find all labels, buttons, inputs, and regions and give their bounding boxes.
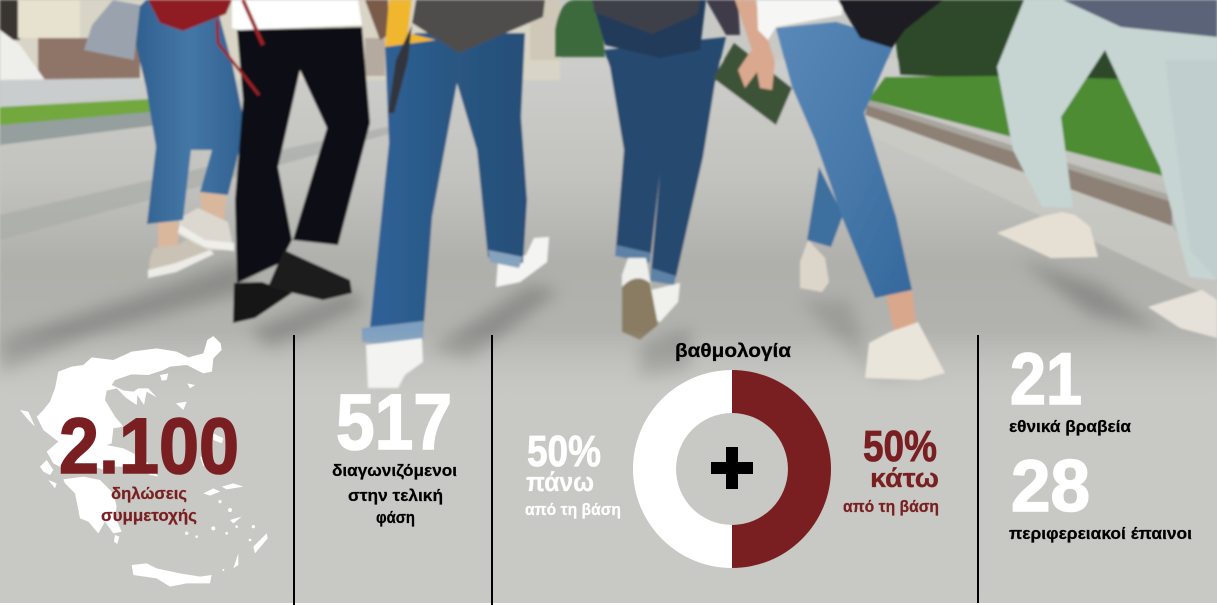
shoes overlaying the fade	[366, 322, 945, 388]
fade from photo into band	[0, 330, 1217, 420]
stat: regional commendations	[1009, 446, 1192, 543]
building at left	[0, 0, 560, 110]
stat: 50% below the base: από τη βάση	[843, 497, 939, 516]
stat: 50% above the base: από τη βάση	[525, 500, 621, 519]
stat: finalists: φάση	[376, 508, 415, 527]
donut chart: grading 50/50	[633, 370, 831, 568]
stat: finalists: 517	[336, 377, 452, 466]
person 4: dark jeans, waist bag and white shoes	[592, 0, 740, 340]
stat: 50% above the base: 50%	[527, 427, 601, 476]
stat: 50% below the base: 50%	[863, 422, 937, 471]
stat: national awards: 21	[1010, 339, 1082, 420]
icon: plus	[711, 447, 753, 489]
divider 2	[491, 335, 493, 605]
book and hand	[713, 0, 792, 125]
road surface	[0, 60, 1217, 400]
stat: 50% below the base: κάτω	[870, 463, 939, 493]
person 6: pale jeans, checked shirt and white shoes	[997, 0, 1217, 338]
person 3: blue jeans, yellow top, grey backpack	[362, 0, 549, 346]
stat: 50% above the base: πάνω	[526, 467, 594, 497]
photo: students walking	[0, 0, 1217, 400]
divider 3	[977, 335, 979, 603]
stat: applications: συμμετοχής	[101, 506, 197, 525]
stat: finalists	[332, 377, 457, 527]
ground shadows	[0, 260, 1160, 385]
icon: map of Greece	[20, 336, 268, 587]
left grass and kerb	[0, 96, 420, 240]
stat: 50% below the base	[843, 422, 939, 516]
right grass, trees and kerb	[850, 0, 1217, 300]
shrub at back	[555, 0, 605, 57]
stat: finalists: στην τελική	[348, 486, 443, 505]
person 5: mid-blue jeans, white shirt, black backpack	[757, 0, 943, 335]
stat: regional commendations: 28	[1011, 446, 1090, 527]
stat: regional commendations: περιφερειακοί έπαινοι	[1009, 524, 1192, 543]
stat: applications: δηλώσεις	[111, 484, 187, 503]
divider 1	[293, 335, 295, 605]
stat: applications	[59, 401, 239, 525]
stat: finalists: διαγωνιζόμενοι	[332, 461, 457, 480]
stat: national awards: εθνικά βραβεία	[1009, 417, 1132, 436]
chart title: βαθμολογία	[675, 341, 791, 362]
stat: applications: 2.100	[59, 401, 239, 490]
person 1: jeans and trainers	[84, 0, 245, 278]
stat: 50% above the base	[525, 427, 621, 519]
person 2: black trousers, white t-shirt, red backpack	[148, 0, 389, 323]
stat: national awards	[1009, 339, 1132, 436]
